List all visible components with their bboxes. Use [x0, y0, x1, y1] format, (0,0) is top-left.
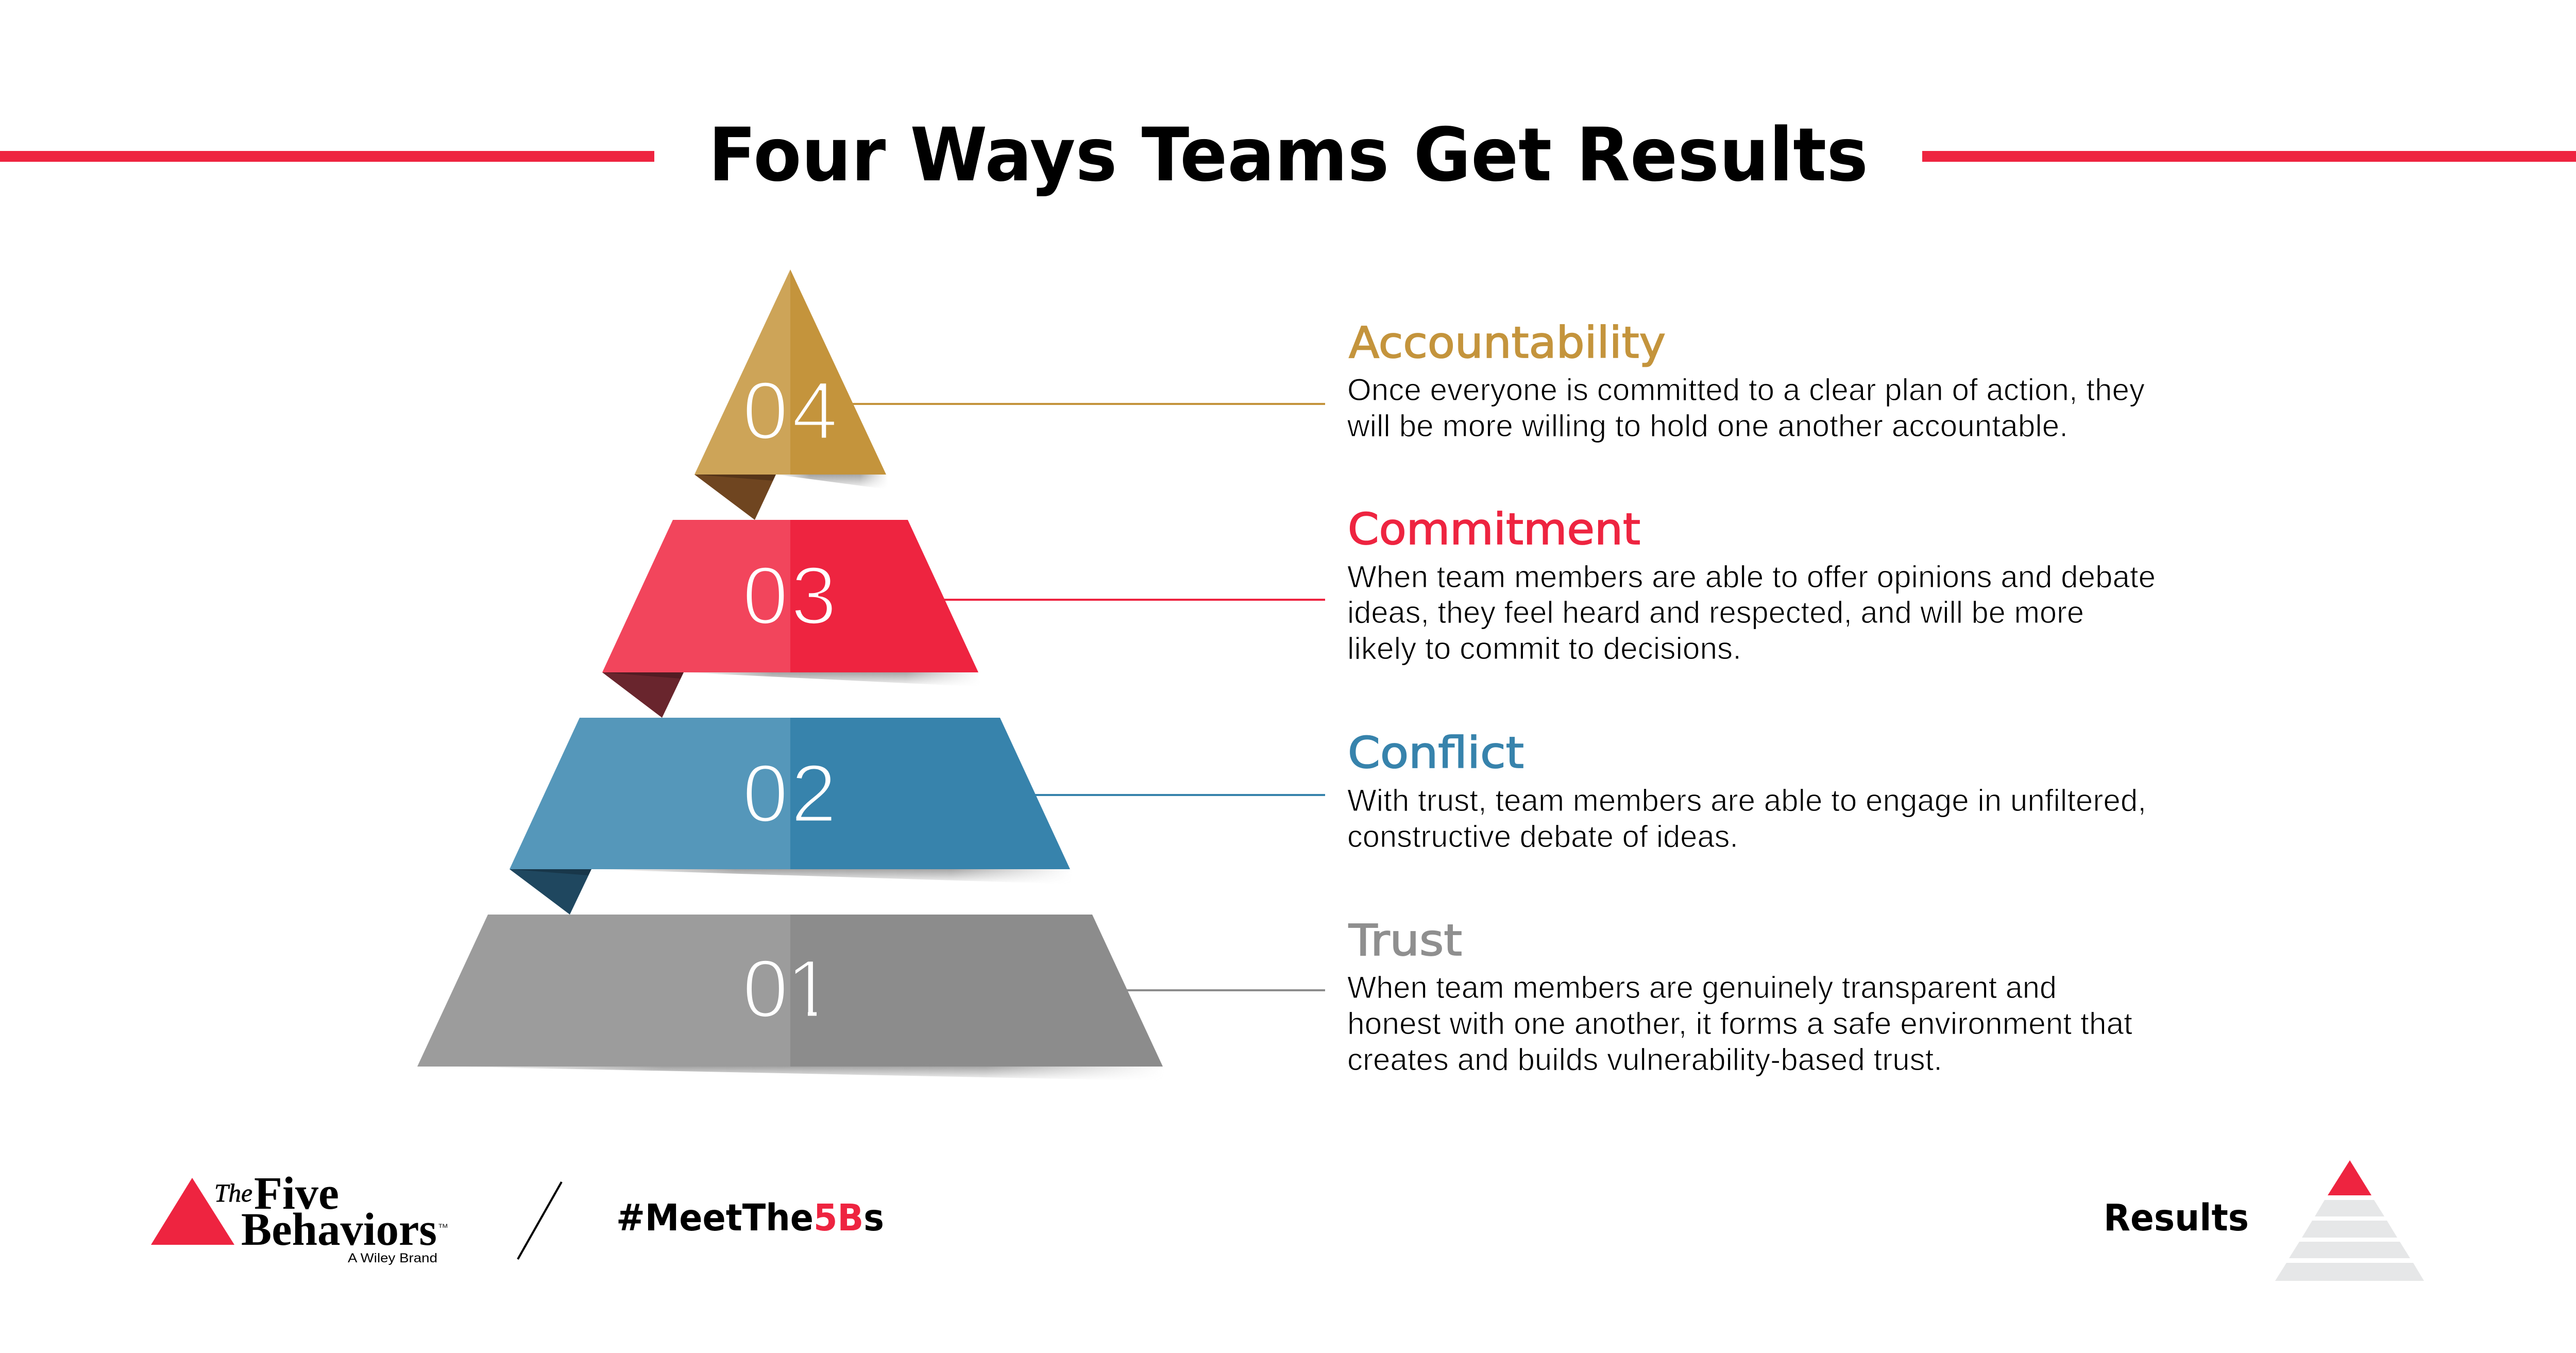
text block: trust: creates and builds vulnerability-based trust. [1347, 1042, 1942, 1077]
text block: commitment [1347, 504, 2156, 666]
logo: The Five Behaviors: Five [254, 1168, 339, 1219]
connector: commitment [927, 599, 1325, 601]
text block: conflict: Conflict [1348, 728, 1524, 778]
text block: accountability: Accountability [1349, 317, 1666, 368]
text block: commitment: likely to commit to decisions. [1347, 631, 1741, 666]
logo: The Five Behaviors: The [214, 1178, 252, 1207]
pyramid tier 03: commitment: 0 [742, 549, 788, 641]
pyramid tier 03: commitment: 3 [791, 549, 837, 641]
text block: conflict: constructive debate of ideas. [1347, 819, 1738, 854]
connector: accountability [824, 403, 1325, 405]
title [0, 112, 2576, 198]
text block: conflict: With trust, team members are able to engage in unfiltered, [1347, 783, 2146, 818]
divider slash [518, 1182, 562, 1259]
logo: The Five Behaviors: Behaviors [241, 1204, 437, 1255]
title: Four Ways Teams Get Results [708, 112, 1868, 198]
pyramid tier 01: trust: 0 [742, 942, 788, 1035]
text block: trust [1347, 915, 2132, 1077]
text block: accountability [1347, 317, 2145, 443]
connector: conflict [1020, 794, 1325, 796]
text block: trust: When team members are genuinely transparent and [1347, 970, 2057, 1005]
pyramid tier 03: commitment [602, 520, 980, 718]
pyramid tier 04: accountability: 4 [792, 364, 838, 456]
text block: accountability: will be more willing to hold one another accountable. [1347, 409, 2068, 443]
pyramid tier 02: conflict: 2 [791, 747, 837, 839]
pyramid tier 01: trust [417, 915, 1165, 1081]
text block: trust: Trust [1348, 915, 1462, 966]
logo: The Five Behaviors: TM [438, 1223, 448, 1229]
logo: The Five Behaviors: A Wiley Brand [348, 1251, 437, 1265]
connector: trust [1108, 989, 1325, 991]
pyramid tier 01: trust: 1 [786, 942, 832, 1035]
logo: The Five Behaviors [151, 1168, 448, 1265]
text block: commitment: ideas, they feel heard and respected, and will be more [1347, 595, 2084, 630]
text block: commitment: Commitment [1348, 504, 1640, 554]
text block: conflict [1347, 728, 2146, 854]
text block: trust: honest with one another, it forms a safe environment that [1347, 1006, 2132, 1041]
pyramid tier 02: conflict [510, 718, 1072, 915]
pyramid tier 04: accountability: 0 [742, 364, 788, 456]
text block: commitment: When team members are able to offer opinions and debate [1347, 560, 2156, 594]
pyramid tier 04: accountability [694, 269, 888, 520]
hashtag: #MeetThe5Bs [616, 1196, 884, 1239]
footer label: results: Results [2104, 1196, 2249, 1239]
text block: accountability: Once everyone is committed to a clear plan of action, they [1347, 373, 2145, 407]
pyramid tier 02: conflict: 0 [742, 747, 788, 839]
icon: small results pyramid [2275, 1160, 2424, 1281]
